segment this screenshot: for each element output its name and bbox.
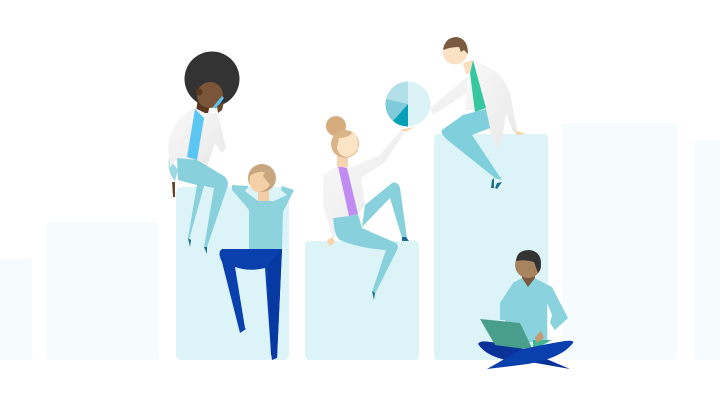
pie chart [385, 81, 430, 127]
figure: man reaching for pie chart [430, 37, 526, 189]
figure: man with hands behind head [220, 164, 294, 360]
figure: woman on phone [168, 52, 240, 254]
bar chart [0, 123, 720, 360]
figure: man with laptop [478, 250, 573, 369]
figure: woman holding pie chart [323, 116, 415, 300]
